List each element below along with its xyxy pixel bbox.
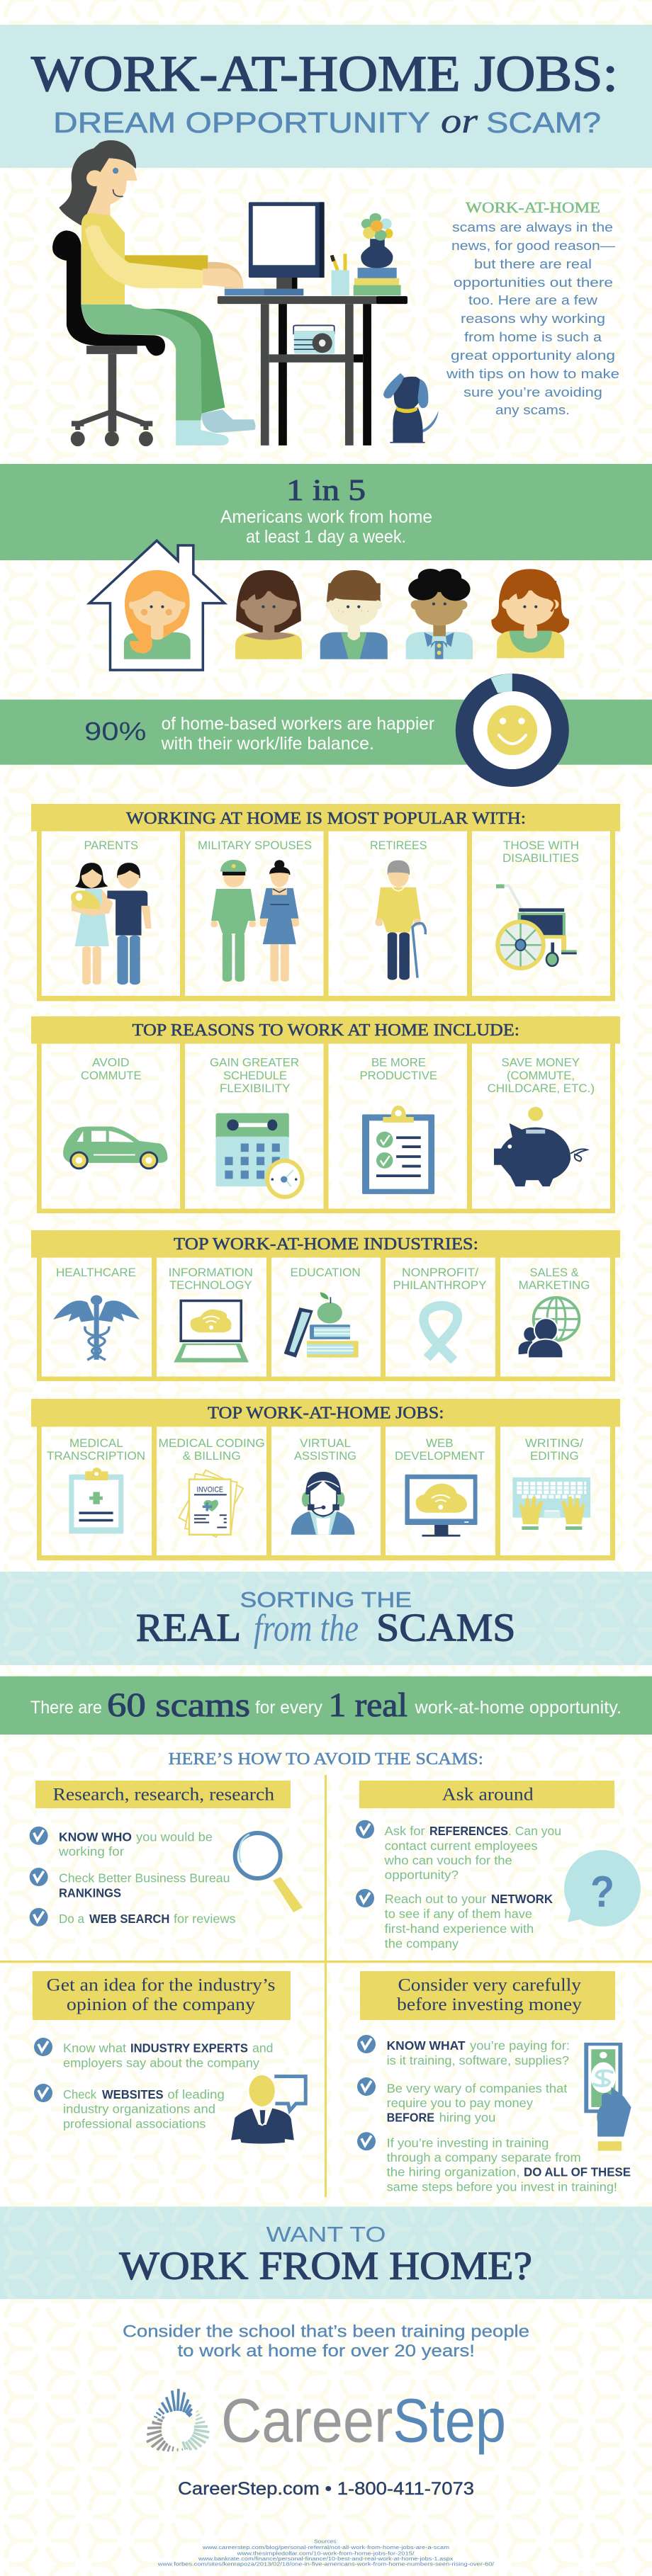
icons: industries — [53, 1292, 579, 1363]
column labels: COMMUTE — [81, 1069, 142, 1082]
tip 1: working for — [58, 1844, 124, 1859]
panel: top reasons — [31, 1016, 620, 1213]
statistic caption: at least 1 day a week. — [246, 527, 406, 547]
icon: wheelchair — [496, 885, 577, 968]
wordmark — [221, 2387, 506, 2456]
column labels: THOSE WITH — [503, 839, 579, 852]
tip 2 — [30, 1868, 230, 1900]
tip 1: KNOW WHAT — [387, 2038, 466, 2053]
intro text block: any scams. — [495, 402, 570, 417]
tip 2: Check — [63, 2087, 96, 2101]
heading: TOP WORK-AT-HOME INDUSTRIES: — [174, 1235, 478, 1254]
banner: sorting the real from the scams: SCAMS — [376, 1606, 516, 1650]
icons: jobs — [69, 1468, 590, 1537]
tip 1 — [34, 2038, 274, 2070]
icons: popular groups — [71, 860, 577, 985]
person: red-haired woman — [491, 569, 569, 658]
tip 1: Know what — [63, 2041, 126, 2055]
tip 3: for reviews — [174, 1912, 236, 1926]
icon: keyboard with hands — [512, 1477, 590, 1530]
tip 2: to see if any of them have — [385, 1907, 532, 1921]
column labels: PHILANTHROPY — [393, 1279, 486, 1292]
icon: pencil cup — [332, 254, 349, 295]
column labels: DEVELOPMENT — [395, 1450, 485, 1463]
panel: research — [30, 1781, 303, 1927]
icon: radio — [293, 325, 335, 353]
icon: businessperson with speech bubble — [231, 2075, 305, 2144]
tip 2: Reach out to your — [385, 1892, 487, 1906]
column labels: SAVE MONEY — [502, 1057, 580, 1069]
column labels: MILITARY SPOUSES — [198, 839, 312, 852]
tip 1: who can vouch for the — [384, 1854, 512, 1868]
subtitle — [53, 101, 601, 140]
column labels: WRITING/ — [525, 1437, 583, 1450]
intro text block — [446, 199, 619, 417]
heading: TOP WORK-AT-HOME JOBS: — [208, 1405, 444, 1423]
tip 2: require you to pay money — [387, 2096, 533, 2110]
subtitle: or — [441, 101, 478, 140]
tip 1: contact current employees — [385, 1839, 538, 1853]
tip 1 — [356, 1820, 561, 1882]
icon: clipboard checklist — [362, 1106, 434, 1194]
panel: investing money: before investing money — [397, 1995, 583, 2014]
sources: www.thesimpledollar.com/10-work-from-home-jobs-for-2015/ — [236, 2550, 415, 2556]
percentage caption: with their work/life balance. — [161, 734, 374, 754]
icon: laptop — [174, 1301, 249, 1363]
column labels: MARKETING — [519, 1279, 590, 1292]
panel: ask around — [356, 1781, 641, 1951]
panel: top industries — [31, 1230, 620, 1381]
intro text block: sure you’re avoiding — [463, 385, 602, 399]
column labels: AVOID — [92, 1057, 130, 1069]
tip 3: WEB SEARCH — [89, 1912, 169, 1926]
panel: most popular with — [31, 804, 620, 1002]
tip 3: the hiring organization, — [387, 2165, 519, 2179]
panel: investing money — [357, 1971, 631, 2194]
column labels: VIRTUAL — [300, 1437, 351, 1450]
column labels: & BILLING — [183, 1450, 241, 1463]
wordmark: Career — [221, 2387, 393, 2456]
icon: books and apple — [284, 1292, 359, 1358]
sources: Sources: — [314, 2538, 338, 2545]
person: blonde woman in house — [124, 570, 191, 659]
icon: question speech bubble — [564, 1850, 641, 1927]
column labels: (COMMUTE, — [507, 1069, 575, 1082]
tip 2: WEBSITES — [102, 2087, 164, 2101]
people row with house — [89, 540, 569, 670]
contact line: CareerStep.com • 1-800-411-7073 — [178, 2479, 474, 2499]
column labels: PRODUCTIVE — [360, 1069, 437, 1082]
tip 2: industry organizations and — [63, 2102, 215, 2116]
wordmark: Step — [393, 2387, 506, 2456]
icon: military spouses — [210, 860, 299, 982]
intro text block: great opportunity along — [451, 348, 615, 363]
column labels: BE MORE — [371, 1057, 426, 1069]
sources: www.bankrate.com/finance/personal-finance/10-best-and-real-work-at-home-jobs-1.aspx — [198, 2555, 454, 2562]
icon: house — [89, 540, 225, 670]
tip 1: you would be — [136, 1829, 213, 1844]
icon: office chair — [52, 230, 165, 446]
tip 2: Be very wary of companies that — [387, 2081, 567, 2095]
tip 1 — [357, 2035, 570, 2067]
panel: 90% statistic — [0, 674, 652, 778]
tip 1: KNOW WHO — [59, 1829, 132, 1844]
tip 1: opportunity? — [385, 1868, 459, 1882]
icon: hand holding money — [584, 2043, 631, 2151]
intro text block: with tips on how to make — [446, 366, 619, 381]
person: boy with freckles — [320, 570, 388, 659]
banner: sorting the real from the scams — [0, 1572, 652, 1665]
tip 1: employers say about the company — [63, 2056, 259, 2070]
banner: 60 scams statistic: 60 scams — [107, 1686, 250, 1724]
panel: investing money: Consider very carefully — [398, 1976, 582, 1995]
title: WORK-AT-HOME JOBS: — [31, 45, 618, 102]
header band with title — [0, 25, 652, 168]
column labels: PARENTS — [84, 839, 138, 852]
banner: sorting the real from the scams: from the — [254, 1607, 359, 1650]
icons: reasons — [63, 1106, 587, 1199]
statistic caption: Americans work from home — [220, 507, 432, 527]
column labels: EDUCATION — [291, 1266, 361, 1279]
column labels: MEDICAL — [69, 1437, 123, 1450]
subtitle: SCAM? — [486, 106, 601, 139]
chart: happiness donut with smile — [464, 674, 560, 778]
icon: magnifying glass — [235, 1833, 303, 1912]
tip 3 — [30, 1908, 236, 1927]
icon: dog — [383, 373, 439, 443]
heading: TOP REASONS TO WORK AT HOME INCLUDE: — [132, 1021, 519, 1040]
intro text block: WORK-AT-HOME — [466, 199, 600, 216]
banner: 60 scams statistic — [0, 1676, 652, 1735]
tip 2: the company — [385, 1936, 459, 1951]
banner: sorting the real from the scams: SORTING THE — [240, 1587, 412, 1612]
percentage caption — [161, 714, 434, 754]
tip 1: is it training, software, supplies? — [387, 2053, 569, 2067]
icon: retiree — [376, 861, 425, 980]
tip 3: through a company separate from — [387, 2150, 581, 2164]
column labels: FLEXIBILITY — [220, 1082, 291, 1095]
tip 1: REFERENCES — [429, 1824, 508, 1838]
tip 3: same steps before you invest in training! — [387, 2180, 617, 2194]
person: dark-haired woman — [235, 570, 302, 659]
column labels — [84, 839, 579, 865]
intro text block: but there are real — [474, 256, 592, 271]
tip 3: Do a — [59, 1912, 84, 1926]
panel: top jobs — [31, 1399, 620, 1560]
intro text block: scams are always in the — [452, 220, 613, 234]
column labels — [47, 1437, 583, 1463]
icon: invoice — [179, 1470, 243, 1537]
banner: sorting the real from the scams: REAL — [136, 1606, 241, 1650]
tip 1 — [30, 1827, 213, 1859]
panel: industry opinion — [33, 1971, 305, 2144]
intro text block: news, for good reason— — [451, 238, 616, 253]
tip 1: and — [252, 2041, 274, 2055]
tip 2: RANKINGS — [59, 1886, 121, 1900]
column labels: TECHNOLOGY — [169, 1279, 252, 1292]
column labels: INFORMATION — [169, 1266, 253, 1279]
tip 2: professional associations — [63, 2116, 206, 2130]
intro text block: opportunities out there — [454, 275, 613, 290]
tip 1: Ask for — [385, 1824, 425, 1838]
sources: www.careerstep.com/blog/personal-referral/not-all-work-from-home-jobs-are-a-scam — [202, 2544, 449, 2551]
panel: 1 in 5 statistic — [0, 464, 652, 560]
icon: calendar with clock — [215, 1113, 304, 1199]
icon: caduceus — [53, 1295, 140, 1360]
column labels: WEB — [426, 1437, 454, 1450]
icon: desk — [218, 296, 408, 446]
column labels — [56, 1266, 590, 1292]
tip 2: hiring you — [439, 2111, 495, 2125]
icon: books and vase of flowers — [354, 213, 401, 295]
column labels: TRANSCRIPTION — [47, 1450, 145, 1463]
column labels — [81, 1057, 595, 1095]
tip 3: If you’re investing in training — [387, 2136, 549, 2150]
intro text block: too. Here are a few — [468, 293, 598, 307]
sources — [157, 2538, 495, 2568]
column labels: MEDICAL CODING — [159, 1437, 265, 1450]
column labels: DISABILITIES — [502, 852, 579, 865]
banner: 60 scams statistic: 1 real — [329, 1686, 408, 1724]
tip 2: Check Better Business Bureau — [59, 1871, 230, 1885]
call to action text: to work at home for over 20 years! — [177, 2342, 475, 2361]
panel: industry opinion: opinion of the company — [67, 1995, 256, 2014]
icon: piggy bank — [494, 1107, 587, 1186]
banner: want to work from home — [0, 2206, 652, 2299]
column labels: ASSISTING — [294, 1450, 356, 1463]
banner: 60 scams statistic: work-at-home opportunity. — [414, 1698, 622, 1718]
illustration: woman working at desk — [52, 140, 439, 446]
icon: headset assistant — [291, 1472, 354, 1535]
column labels: HEALTHCARE — [56, 1266, 136, 1279]
tip 2: BEFORE — [387, 2111, 434, 2125]
intro text block: from home is such a — [464, 329, 602, 344]
icon: woman — [59, 140, 256, 446]
heading: WORKING AT HOME IS MOST POPULAR WITH: — [126, 810, 526, 828]
person: man with curly hair — [406, 569, 473, 659]
icon: parents — [71, 863, 152, 985]
panel: research: Research, research, research — [52, 1786, 275, 1805]
tip 2 — [357, 2077, 567, 2125]
tip 3: DO ALL OF THESE — [524, 2165, 631, 2179]
invoice word: INVOICE — [197, 1486, 223, 1494]
panel: industry opinion: Get an idea for the industry’s — [47, 1976, 275, 1995]
big number: 1 in 5 — [286, 475, 366, 507]
banner: want to work from home: WANT TO — [266, 2222, 386, 2247]
tip 2 — [34, 2084, 225, 2130]
banner: 60 scams statistic: There are — [30, 1698, 102, 1718]
call to action text — [123, 2322, 529, 2361]
icon: medical clipboard — [69, 1468, 123, 1533]
panel: ask around: Ask around — [442, 1786, 534, 1805]
percentage caption: of home-based workers are happier — [162, 714, 434, 734]
tip 1: you’re paying for: — [470, 2038, 570, 2053]
percentage: 90% — [84, 717, 146, 746]
tip 1: INDUSTRY EXPERTS — [130, 2041, 248, 2055]
banner: 60 scams statistic: for every — [255, 1698, 322, 1718]
tip 2: of leading — [167, 2087, 225, 2101]
tip 2: NETWORK — [491, 1892, 553, 1906]
tip 2 — [356, 1889, 553, 1951]
icon: desktop monitor — [405, 1475, 478, 1537]
intro text block: reasons why working — [461, 311, 605, 326]
subtitle: DREAM OPPORTUNITY — [53, 106, 430, 139]
column labels: RETIREES — [370, 839, 427, 852]
banner: want to work from home: WORK FROM HOME? — [119, 2244, 532, 2288]
column labels: GAIN GREATER — [210, 1057, 299, 1069]
column labels: CHILDCARE, ETC.) — [488, 1082, 595, 1095]
statistic caption — [220, 507, 432, 547]
icon: car — [63, 1127, 167, 1169]
column labels: SALES & — [530, 1266, 579, 1279]
sources: www.forbes.com/sites/kenrapoza/2013/02/18/one-in-five-americans-work-from-home-numbers-seen-rising-over-60/ — [157, 2561, 495, 2568]
call to action text: Consider the school that’s been training people — [123, 2322, 529, 2342]
icon: computer — [225, 202, 325, 295]
logo: CareerStep — [147, 2387, 506, 2456]
column labels: EDITING — [530, 1450, 579, 1463]
tip 1: . Can you — [508, 1824, 561, 1838]
icon: globe with people — [519, 1298, 579, 1358]
icon: sunburst mark — [147, 2389, 209, 2451]
icon: awareness ribbon — [424, 1305, 458, 1361]
icon: question speech bubble: ? — [590, 1868, 614, 1917]
heading: how to avoid scams: HERE’S HOW TO AVOID THE SCAMS: — [169, 1750, 483, 1769]
column labels: SCHEDULE — [223, 1069, 287, 1082]
tip 3 — [357, 2132, 631, 2194]
column labels: NONPROFIT/ — [402, 1266, 478, 1279]
tip 2: first-hand experience with — [385, 1922, 534, 1936]
